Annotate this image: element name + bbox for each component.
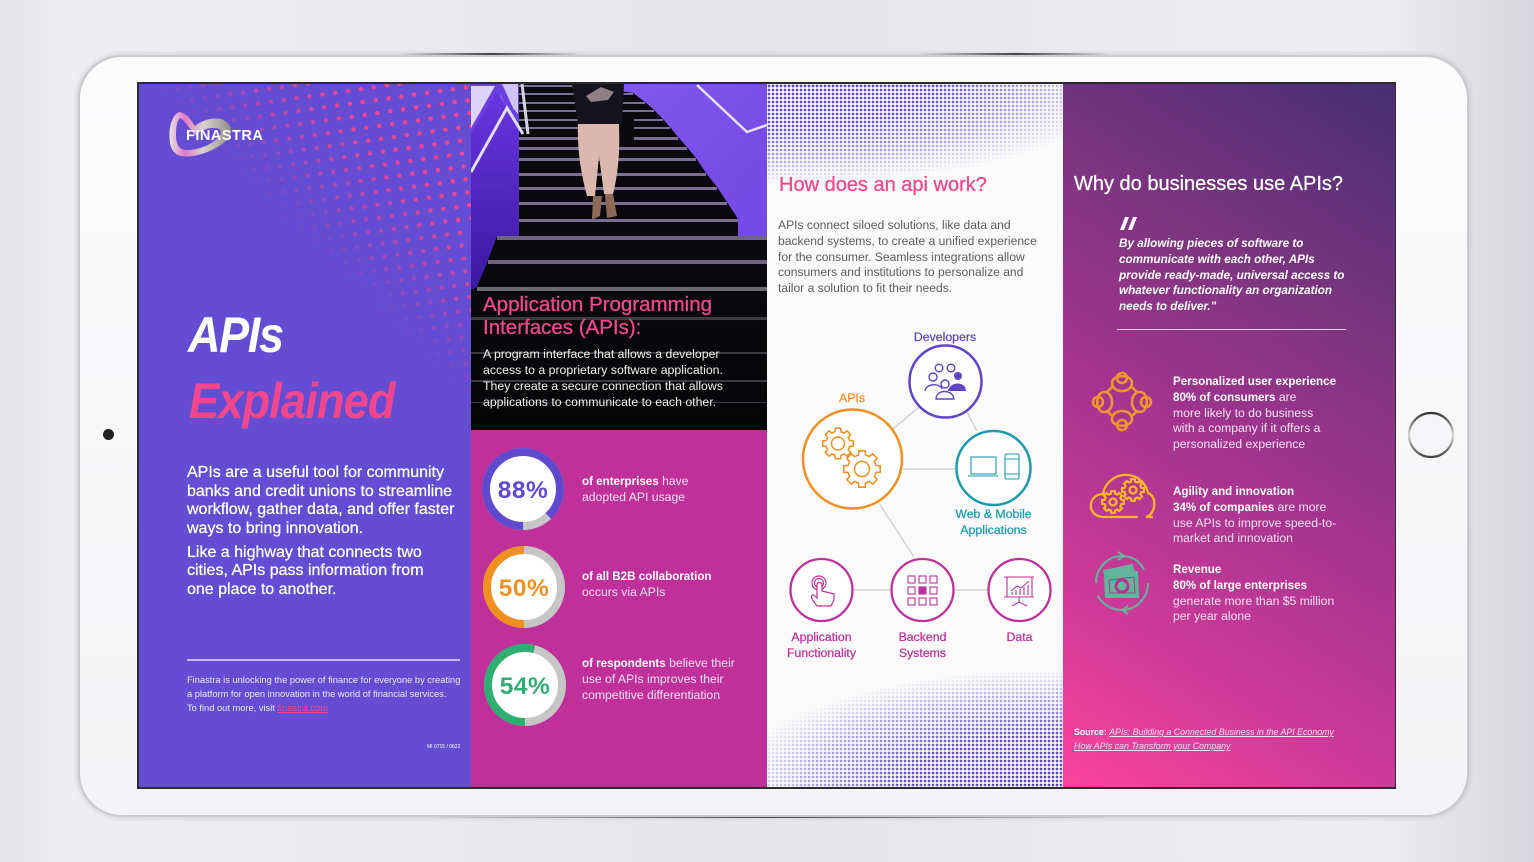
stairs photo: [471, 84, 767, 403]
halftone dots: [162, 84, 471, 404]
quote: provide ready-made, universal access to: [1119, 269, 1344, 282]
node: backend systems: Systems: [899, 646, 946, 660]
reason: agility: 34% of companies are more: [1173, 500, 1326, 514]
definition heading: [482, 293, 712, 339]
quote: By allowing pieces of software to: [1119, 237, 1303, 250]
reason: revenue: 80% of large enterprises: [1173, 579, 1307, 592]
reason: revenue: per year alone: [1173, 609, 1251, 623]
body text: backend systems, to create a unified experience: [778, 234, 1037, 248]
definition text: access to a proprietary software application.: [483, 363, 723, 377]
node: application functionality: Application: [791, 630, 852, 644]
company note: Finastra is unlocking the power of finance for everyone by creating: [187, 675, 460, 685]
reason: personalized: personalized experience: [1173, 437, 1305, 451]
definition heading: Application Programming: [483, 293, 712, 316]
definition text: applications to communicate to each other.: [483, 395, 716, 409]
intro text: one place to another.: [187, 581, 336, 598]
reason: personalized: [1092, 372, 1336, 451]
tablet home button: [1408, 412, 1454, 458]
document code: MI 0715 / 0622: [427, 744, 460, 750]
intro text: Like a highway that connects two: [187, 544, 422, 561]
definition heading: Interfaces (APIs):: [483, 316, 641, 339]
reason: personalized: more likely to do business: [1173, 406, 1313, 420]
quote mark: [1120, 217, 1137, 230]
node: developers: Developers: [914, 330, 976, 344]
node: application functionality: [787, 559, 857, 660]
screen frame: [137, 82, 1396, 789]
node: backend systems: [892, 559, 954, 660]
stat 54%: of respondents believe their: [582, 656, 735, 670]
node: data: [988, 559, 1050, 644]
title: Explained: [189, 373, 395, 429]
panel: why businesses use APIs: [1063, 84, 1395, 787]
stat 54%: competitive differentiation: [582, 688, 720, 702]
intro text: banks and credit unions to streamline: [187, 483, 452, 500]
logo: FINASTRA: [186, 128, 263, 144]
panel: how an API works: [767, 84, 1063, 787]
logo: [169, 112, 263, 157]
panel: definition photo: [471, 84, 767, 430]
node: application functionality: Functionality: [787, 646, 857, 660]
quote: needs to deliver.": [1119, 300, 1216, 313]
node: APIs: APIs: [839, 391, 865, 405]
stat 54%: [484, 644, 735, 726]
reason: agility: use APIs to improve speed-to-: [1173, 516, 1336, 530]
stat 50%: occurs via APIs: [582, 585, 665, 599]
tablet bezel: [80, 57, 1467, 815]
body text: for the consumer. Seamless integrations allow: [778, 250, 1025, 264]
node: data: Data: [1007, 630, 1033, 644]
node: web and mobile: [955, 431, 1032, 537]
halftone bottom: [767, 667, 1063, 787]
stat 88%: 88%: [498, 477, 548, 504]
heading: Why do businesses use APIs?: [1074, 173, 1343, 195]
node: web and mobile: Web & Mobile: [955, 507, 1032, 521]
stat 54%: use of APIs improves their: [582, 672, 724, 686]
body text: APIs connect siloed solutions, like data and: [778, 218, 1011, 232]
quote: communicate with each other, APIs: [1119, 253, 1315, 266]
body text: tailor a solution to fit their needs.: [778, 281, 952, 295]
source links: Source: APIs: Building a Connected Business in the API Economy: [1074, 727, 1334, 737]
quote: whatever functionality an organization: [1119, 284, 1332, 297]
reason: personalized: 80% of consumers are: [1173, 390, 1296, 404]
stat 88%: of enterprises have: [582, 474, 689, 488]
title: APIs: [188, 307, 283, 363]
node: developers: [910, 330, 982, 418]
body text: [778, 218, 1037, 295]
source links: [1074, 727, 1334, 751]
node: web and mobile: Applications: [960, 523, 1027, 537]
reason: agility: [1090, 474, 1336, 545]
company note: a platform for open innovation in the world of financial services.: [187, 689, 446, 699]
reason: revenue: [1095, 551, 1334, 623]
stat 50%: of all B2B collaboration: [582, 570, 711, 583]
company note: [187, 675, 460, 713]
halftone top: [767, 84, 1063, 184]
stat 50%: 50%: [499, 575, 549, 602]
reason: agility: Agility and innovation: [1173, 485, 1294, 498]
title: [187, 307, 396, 429]
tablet camera: [103, 429, 114, 440]
intro text: workflow, gather data, and offer faster: [187, 501, 454, 518]
panel: statistics: [471, 430, 767, 787]
intro text: [186, 464, 454, 598]
stat 88%: [482, 448, 689, 530]
panel: intro: [139, 84, 471, 787]
body text: consumers and institutions to personalize and: [778, 265, 1023, 279]
definition text: [483, 347, 723, 409]
stat 88%: adopted API usage: [582, 490, 685, 504]
reason: agility: market and innovation: [1173, 531, 1293, 545]
reason: personalized: Personalized user experience: [1173, 375, 1336, 388]
node: backend systems: Backend: [899, 630, 947, 644]
reason: revenue: Revenue: [1173, 563, 1221, 576]
stat 54%: 54%: [500, 673, 550, 700]
intro text: APIs are a useful tool for community: [187, 464, 444, 481]
node: APIs: [803, 391, 902, 508]
reason: personalized: with a company if it offers a: [1173, 421, 1320, 435]
company note: To find out more, visit finastra.com: [187, 703, 328, 713]
stat 50%: [483, 546, 711, 628]
reason: revenue: generate more than $5 million: [1173, 594, 1334, 608]
definition text: They create a secure connection that allows: [483, 379, 723, 393]
source links: How APIs can Transform your Company: [1074, 741, 1230, 751]
quote: [1118, 237, 1344, 313]
intro text: cities, APIs pass information from: [187, 562, 424, 579]
intro text: ways to bring innovation.: [187, 520, 363, 537]
heading: How does an api work?: [779, 174, 987, 196]
definition text: A program interface that allows a developer: [483, 347, 720, 361]
